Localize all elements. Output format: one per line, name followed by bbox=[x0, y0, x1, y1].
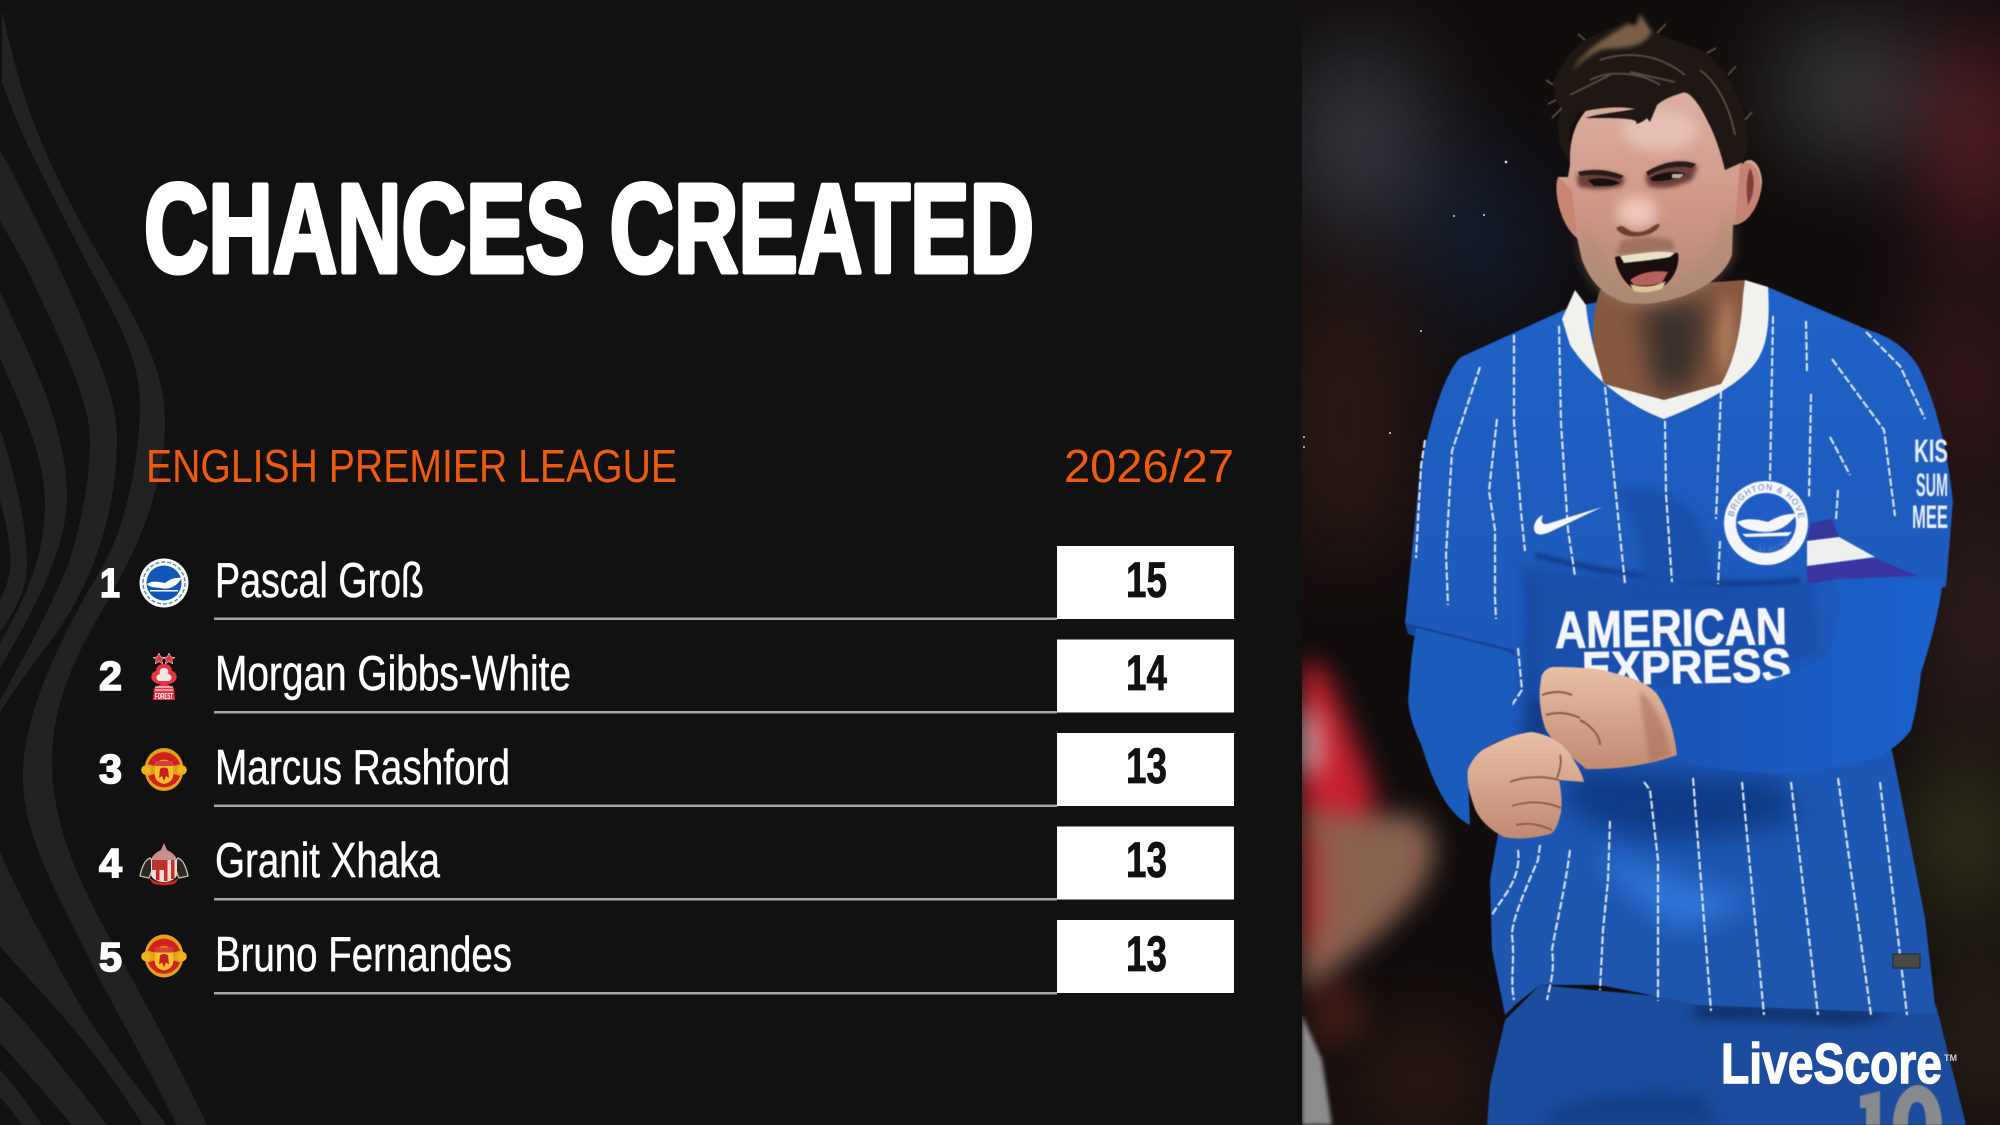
club crest on shirt: ALBION bbox=[1757, 538, 1790, 554]
row 4: Granit Xhaka: 4 bbox=[99, 840, 122, 886]
sponsor: American Express: AMERICAN bbox=[1554, 598, 1787, 660]
value box: 13 bbox=[1126, 926, 1167, 982]
blurred stadium background bbox=[1285, 0, 2000, 1125]
player: SUM bbox=[1916, 467, 1948, 503]
right fist bbox=[1540, 667, 1677, 769]
club crest on shirt bbox=[1723, 480, 1809, 566]
value box bbox=[1057, 920, 1234, 993]
subheading: competition: ENGLISH PREMIER LEAGUE bbox=[146, 440, 677, 492]
club crest on shirt: BRIGHTON & HOVE bbox=[1728, 484, 1805, 519]
row 3: Marcus Rashford: 3 bbox=[99, 746, 122, 792]
row 1: Pascal Groß bbox=[100, 546, 1234, 620]
right arm long sleeve bbox=[1690, 580, 1943, 773]
value box: 13 bbox=[1126, 832, 1167, 888]
captain armband bbox=[1807, 519, 1918, 584]
row 5: Bruno Fernandes: 5 bbox=[99, 934, 122, 980]
subheading: season: 2026/27 bbox=[1064, 440, 1234, 492]
logo: LiveScore: LiveScore bbox=[1721, 1032, 1942, 1096]
sleeve patch: KIS bbox=[1914, 433, 1948, 469]
left arm long sleeve bbox=[1408, 628, 1515, 825]
nike swoosh bbox=[1534, 507, 1602, 534]
left fist bbox=[1467, 732, 1584, 838]
value box bbox=[1057, 640, 1234, 712]
row 5: Bruno Fernandes bbox=[99, 920, 1234, 994]
icon: Nottingham Forest crest: FOREST bbox=[155, 692, 173, 701]
label bbox=[1893, 954, 1920, 968]
row 2: Morgan Gibbs-White: Morgan Gibbs-White bbox=[215, 647, 571, 701]
cropped shirt number on shorts bbox=[1860, 1085, 1942, 1125]
row 4: Granit Xhaka bbox=[99, 826, 1234, 900]
brows and eyes bbox=[1577, 172, 1625, 189]
player bbox=[1404, 13, 1966, 1125]
icon: Brighton crest bbox=[140, 558, 188, 608]
sponsor: American Express bbox=[1555, 606, 1791, 686]
sponsor: American Express: EXPRESS bbox=[1581, 638, 1791, 695]
icon: Sunderland crest bbox=[140, 843, 188, 885]
hair bbox=[1553, 13, 1748, 170]
value box bbox=[1057, 733, 1234, 806]
panel: player photo bbox=[1302, 0, 2000, 1125]
shorts bbox=[1487, 985, 1966, 1125]
head bbox=[1546, 13, 1762, 305]
title: CHANCES CREATED bbox=[144, 158, 1034, 299]
sleeve patch: MEE bbox=[1912, 499, 1948, 535]
icon: Manchester United crest bbox=[141, 748, 187, 791]
value box bbox=[1057, 546, 1234, 619]
panel: dark background bbox=[0, 0, 1302, 1125]
icon: Nottingham Forest crest bbox=[151, 653, 177, 701]
value box bbox=[1057, 826, 1234, 900]
row 2: Morgan Gibbs-White: 2 bbox=[99, 653, 122, 699]
jersey bbox=[1405, 287, 1953, 1015]
logo: LiveScore: TM bbox=[1944, 1053, 1957, 1063]
jersey pinstripes bbox=[1416, 316, 1925, 1015]
row 1: Pascal Groß: 1 bbox=[100, 560, 120, 606]
value box: 14 bbox=[1126, 645, 1167, 701]
value box: 13 bbox=[1126, 738, 1167, 794]
jersey collar bbox=[1562, 280, 1769, 419]
row 1: Pascal Groß: Pascal Groß bbox=[215, 554, 424, 608]
icon: Manchester United crest bbox=[141, 934, 187, 978]
nose shadow bbox=[1616, 224, 1660, 236]
value box: 15 bbox=[1126, 552, 1167, 608]
row 2: Morgan Gibbs-White bbox=[99, 640, 1234, 714]
sleeve patch bbox=[1912, 438, 1948, 529]
row 3: Marcus Rashford bbox=[99, 733, 1234, 807]
row 3: Marcus Rashford: Marcus Rashford bbox=[215, 741, 510, 795]
mouth bbox=[1615, 252, 1678, 292]
neck bbox=[1593, 280, 1745, 402]
row 5: Bruno Fernandes: Bruno Fernandes bbox=[215, 928, 512, 982]
spray droplets bbox=[1303, 161, 1507, 448]
row 4: Granit Xhaka: Granit Xhaka bbox=[215, 834, 441, 888]
background wave pattern bbox=[0, 11, 207, 1125]
logo: LiveScore bbox=[1724, 1041, 1956, 1084]
